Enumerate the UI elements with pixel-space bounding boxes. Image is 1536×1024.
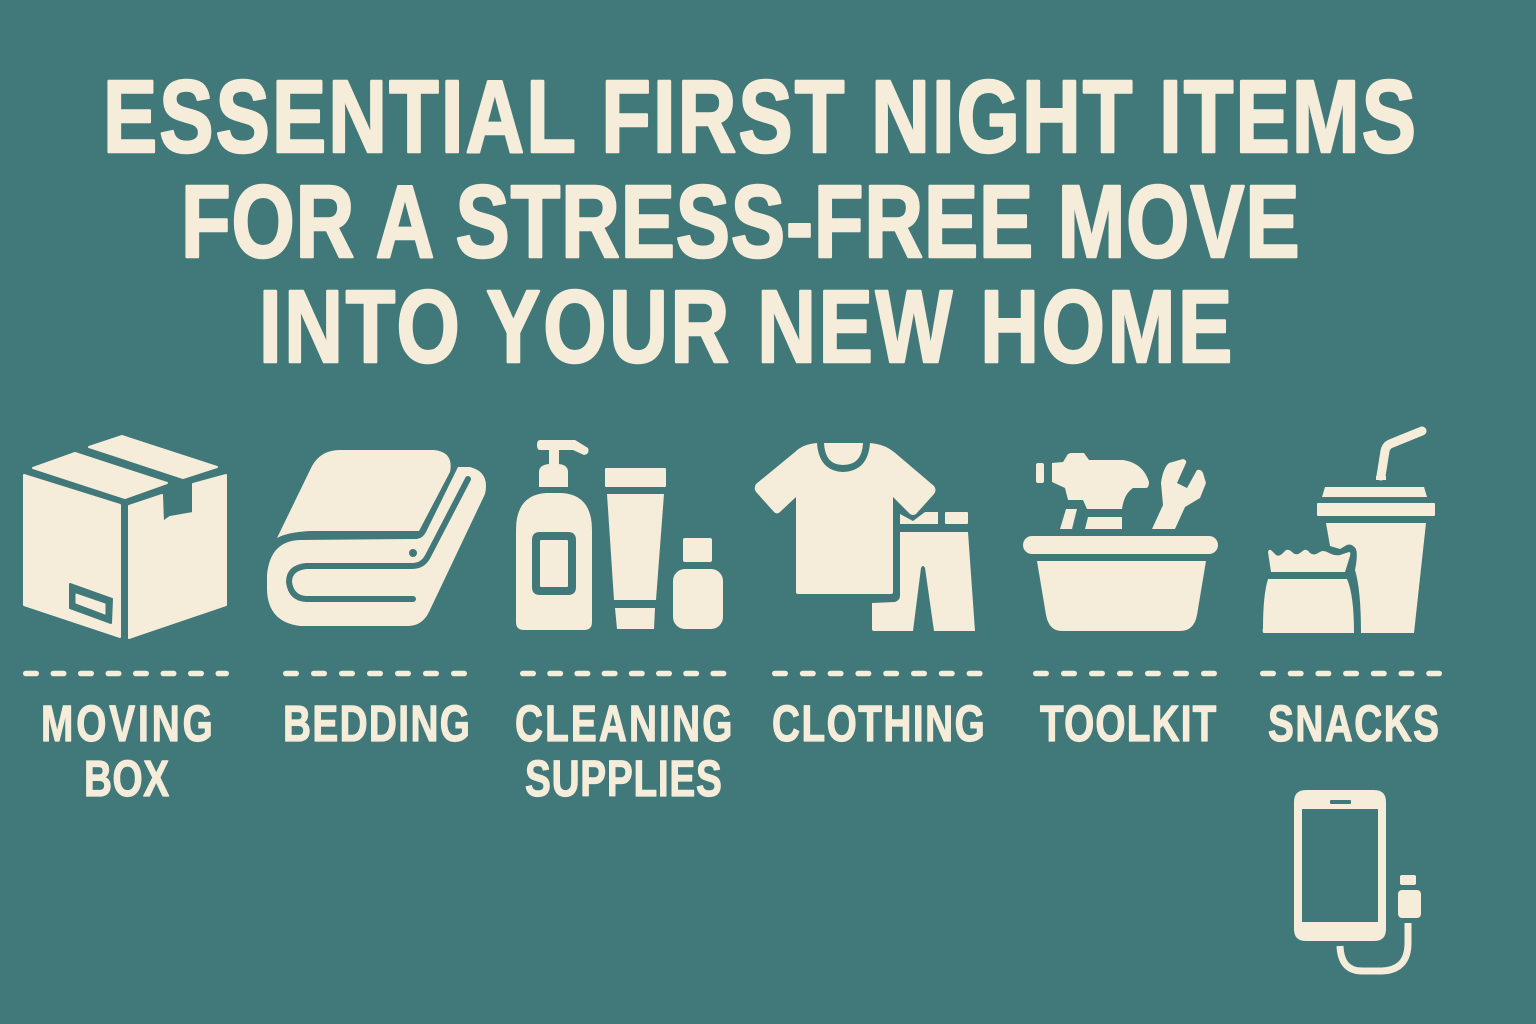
label: moving box: BOX	[84, 750, 169, 807]
title: INTO YOUR NEW HOME	[259, 269, 1232, 384]
item: clothing	[755, 443, 985, 752]
item: bedding	[267, 450, 486, 752]
icon: spray bottle, wrench and tub	[1023, 453, 1218, 631]
icon: folded blanket	[267, 450, 486, 626]
label: cleaning supplies	[515, 695, 732, 807]
item: moving box	[24, 436, 226, 807]
icon: t-shirt and trousers	[755, 443, 975, 631]
item: snacks	[1263, 431, 1439, 752]
label: cleaning supplies: CLEANING	[515, 695, 732, 752]
title: ESSENTIAL FIRST NIGHT ITEMS	[103, 59, 1416, 174]
title: FOR A STRESS-FREE MOVE	[181, 164, 1300, 279]
label: cleaning supplies: SUPPLIES	[525, 750, 722, 807]
icon: phone and charger	[1294, 790, 1421, 971]
label: snacks: SNACKS	[1268, 695, 1439, 752]
icon: cardboard box	[24, 436, 226, 638]
title	[103, 59, 1416, 384]
icon: bottles and tube	[516, 440, 723, 630]
icon: drink cup and snack bag	[1263, 431, 1435, 633]
label: moving box: MOVING	[41, 695, 213, 752]
label: clothing: CLOTHING	[772, 695, 985, 752]
label: moving box	[41, 695, 213, 807]
label: bedding: BEDDING	[283, 695, 470, 752]
item: cleaning supplies	[515, 440, 732, 807]
label: toolkit: TOOLKIT	[1040, 695, 1217, 752]
item: toolkit	[1023, 453, 1218, 752]
